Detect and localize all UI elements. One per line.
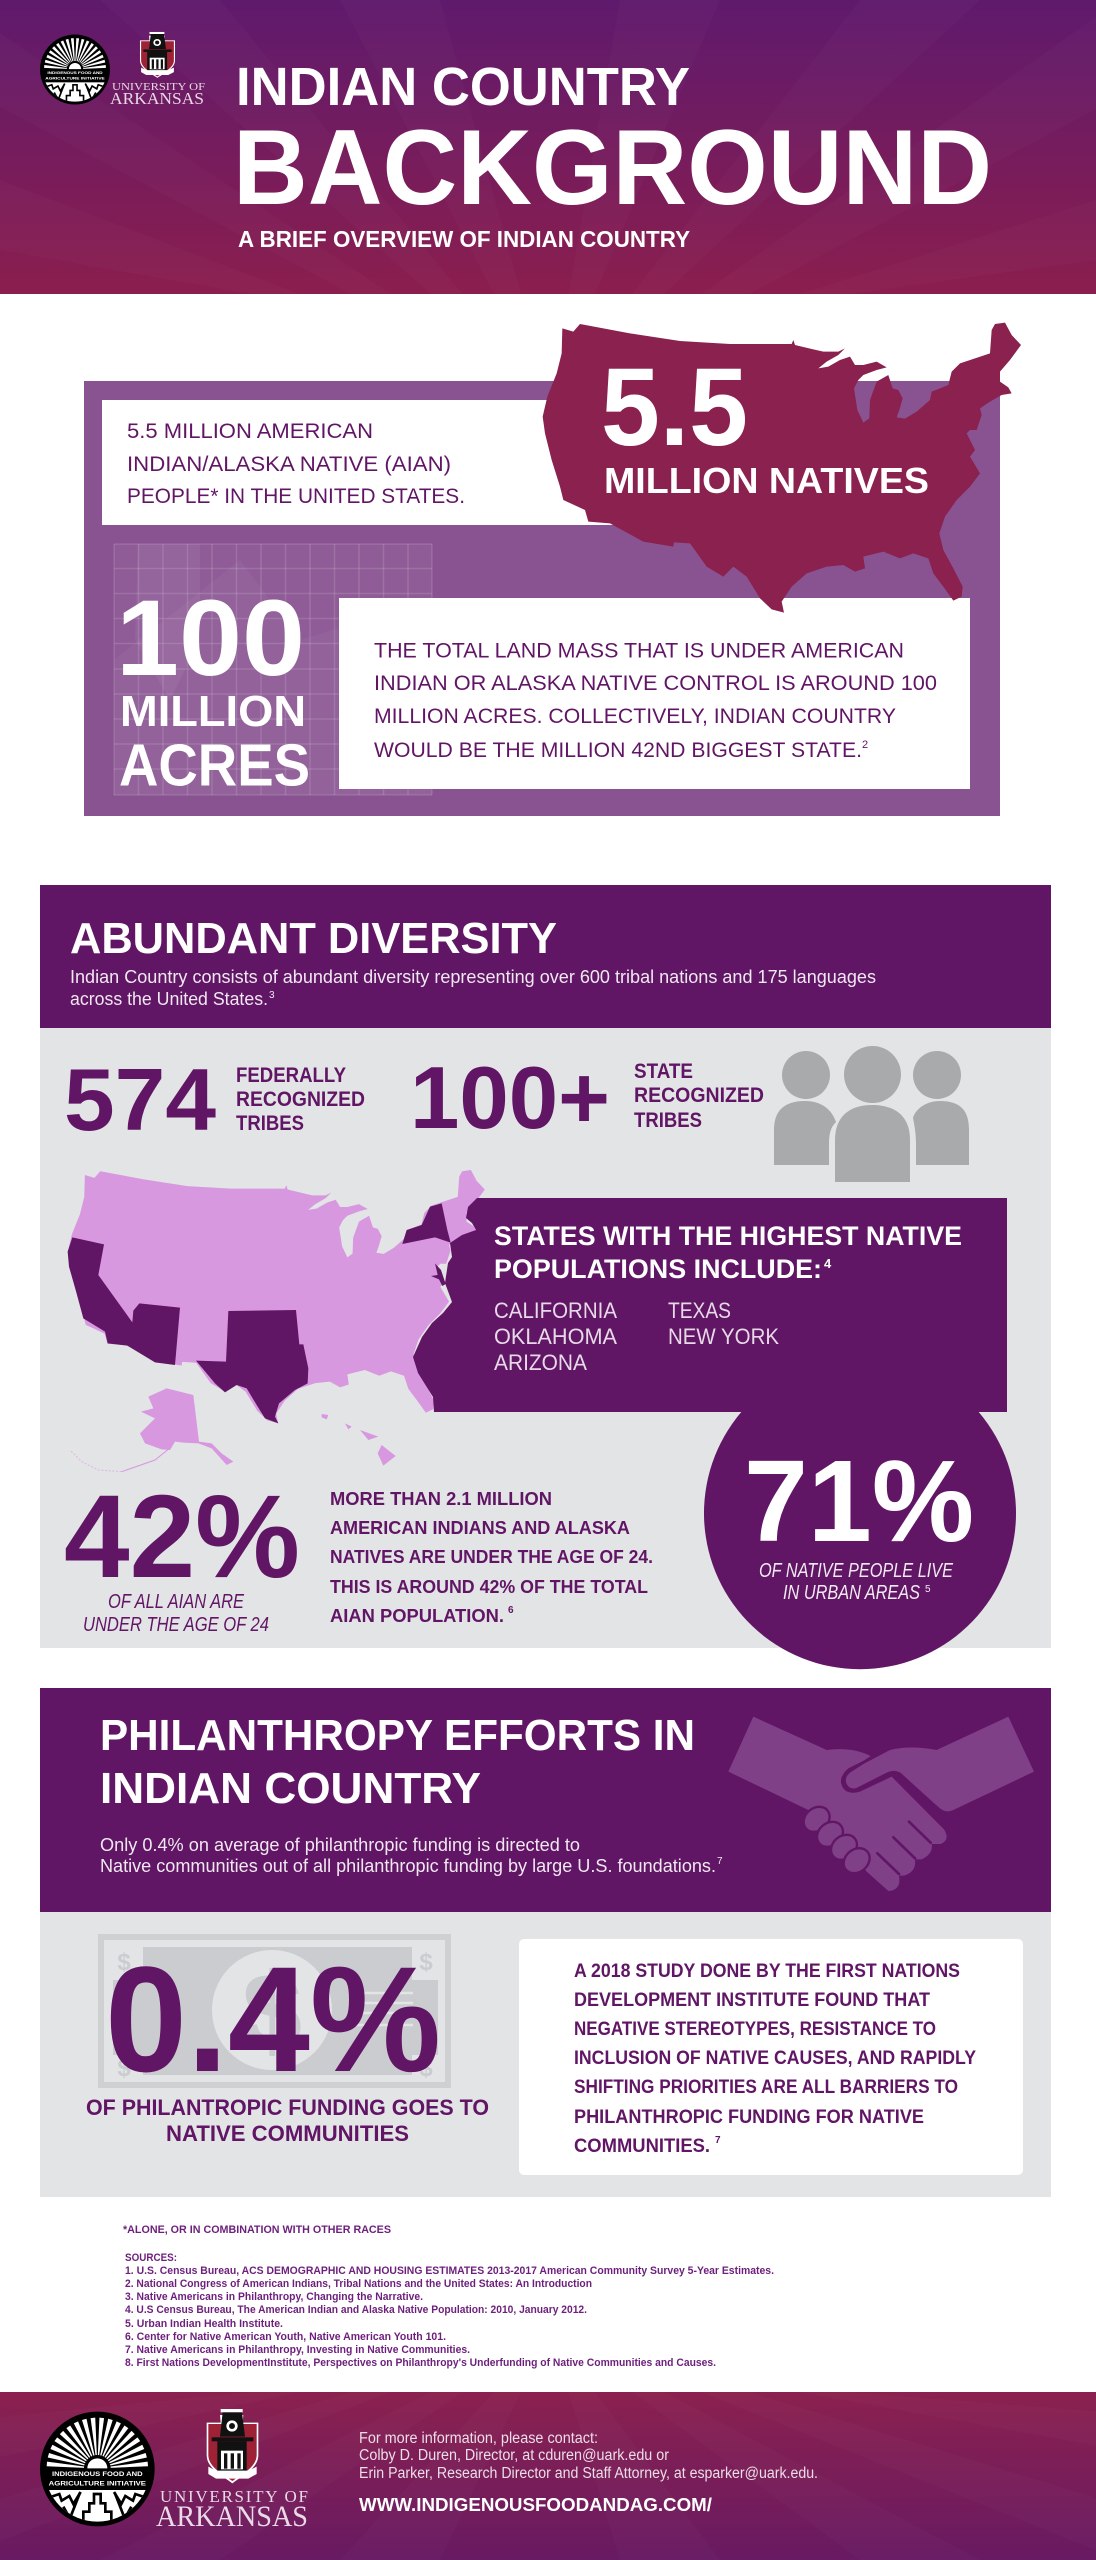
- icon: dollar bill: [98, 1934, 451, 2088]
- stat: 574 federally recognized tribes: 574: [64, 1050, 216, 1149]
- panel: population and land: [84, 323, 1021, 816]
- section header: philanthropy: PHILANTHROPY EFFORTS IN: [100, 1711, 695, 1760]
- stat: 574 federally recognized tribes: [64, 1050, 365, 1149]
- stat: 100 million acres: MILLION: [120, 687, 306, 736]
- callout: 2018 study: 7: [715, 2135, 721, 2146]
- text block: 2.1 million under 24: AMERICAN INDIANS AND ALASKA: [330, 1518, 630, 1538]
- logo: University of Arkansas (footer): ARKANSAS: [156, 2500, 308, 2533]
- stat: 0.4 percent: 0.4%: [105, 1935, 441, 2103]
- footnotes and sources: SOURCES:: [125, 2252, 177, 2264]
- panel: abundant diversity: [40, 885, 1051, 1648]
- subtitle: A BRIEF OVERVIEW OF INDIAN COUNTRY: [238, 226, 690, 252]
- footnotes and sources: 1. U.S. Census Bureau, ACS DEMOGRAPHIC AND HOUSING ESTIMATES 2013-2017 American Community Survey 5-Year Estimates.: [125, 2265, 774, 2277]
- callout: 2018 study: COMMUNITIES.: [574, 2136, 710, 2157]
- stat: 574 federally recognized tribes: TRIBES: [236, 1112, 304, 1135]
- callout: states list box: STATES WITH THE HIGHEST NATIVE: [494, 1221, 962, 1251]
- callout: 71 percent circle: OF NATIVE PEOPLE LIVE: [759, 1560, 954, 1582]
- stat: 100 million acres: [116, 577, 310, 798]
- map: states with highest native populations: [68, 1170, 485, 1472]
- acreage grid: [114, 544, 432, 795]
- stat: 100+ state recognized tribes: [410, 1048, 764, 1147]
- callout: 2018 study: SHIFTING PRIORITIES ARE ALL BARRIERS TO: [574, 2077, 958, 2098]
- text block: 2.1 million under 24: [330, 1489, 653, 1626]
- contact information: Colby D. Duren, Director, at cduren@uark.edu or: [359, 2447, 669, 2464]
- section header: philanthropy: 7: [717, 1856, 723, 1867]
- logo: University of Arkansas (footer): [156, 2409, 308, 2533]
- callout: land mass text box: MILLION ACRES. COLLECTIVELY, INDIAN COUNTRY: [374, 705, 896, 728]
- logo: Indigenous Food and Agriculture Initiative (footer): [40, 2412, 155, 2526]
- stat: 574 federally recognized tribes: FEDERALLY: [236, 1064, 346, 1087]
- stat: 100+ state recognized tribes: STATE: [634, 1060, 693, 1083]
- icon: dollar bill: $: [242, 1950, 302, 2071]
- stat: 100 million acres: 100: [116, 577, 305, 698]
- callout: states list box: POPULATIONS INCLUDE:: [494, 1254, 822, 1284]
- footnotes and sources: 4. U.S Census Bureau, The American Indian and Alaska Native Population: 2010, January 2012.: [125, 2304, 587, 2316]
- callout: 71 percent circle: 5: [925, 1584, 931, 1595]
- stat: 5.5 million natives: MILLION NATIVES: [604, 460, 929, 501]
- logo: University of Arkansas: UNIVERSITY OF: [112, 81, 205, 93]
- callout: states list box: CALIFORNIA: [494, 1298, 617, 1323]
- callout: states list box: 4: [824, 1256, 832, 1271]
- footer banner: [0, 2392, 1096, 2560]
- callout: 5.5 million text box: PEOPLE* IN THE UNITED STATES.: [127, 485, 465, 508]
- callout: 2018 study: INCLUSION OF NATIVE CAUSES, AND RAPIDLY: [574, 2048, 976, 2069]
- callout: 2018 study: A 2018 STUDY DONE BY THE FIRST NATIONS: [574, 1961, 960, 1982]
- callout: land mass text box: INDIAN OR ALASKA NATIVE CONTROL IS AROUND 100: [374, 672, 937, 695]
- stat: 100 million acres: ACRES: [119, 732, 310, 798]
- title: INDIAN COUNTRY: [236, 57, 690, 117]
- icon: dollar bill: $: [419, 2055, 433, 2082]
- stat: 42 percent under age 24: 42%: [64, 1471, 300, 1603]
- callout: 71 percent circle: [704, 1412, 1016, 1669]
- footnotes and sources: 2. National Congress of American Indians, Tribal Nations and the United States: An Introduction: [125, 2278, 592, 2290]
- section header: philanthropy: INDIAN COUNTRY: [100, 1764, 481, 1813]
- title: BACKGROUND: [233, 107, 992, 227]
- stat: 100+ state recognized tribes: 100+: [410, 1048, 610, 1147]
- icon: dollar bill: $: [117, 2055, 131, 2082]
- website: WWW.INDIGENOUSFOODANDAG.COM/: [359, 2495, 712, 2515]
- section header: philanthropy: Only 0.4% on average of philanthropic funding is directed to: [100, 1835, 580, 1855]
- section header: philanthropy: Native communities out of all philanthropic funding by large U.S. foundations.: [100, 1856, 716, 1876]
- section header: abundant diversity: ABUNDANT DIVERSITY: [70, 914, 557, 963]
- logo: Indigenous Food and Agriculture Initiative (footer): AGRICULTURE INITIATIVE: [49, 2482, 146, 2488]
- callout: 71 percent circle: 71%: [744, 1436, 974, 1566]
- logo: Indigenous Food and Agriculture Initiative (footer): INDIGENOUS FOOD AND: [52, 2472, 144, 2478]
- footnotes and sources: 6. Center for Native American Youth, Native American Youth 101.: [125, 2331, 446, 2343]
- contact information: [359, 2430, 818, 2482]
- stat: 100+ state recognized tribes: TRIBES: [634, 1109, 702, 1132]
- stat: 100+ state recognized tribes: RECOGNIZED: [634, 1084, 764, 1107]
- section header: abundant diversity: [40, 885, 1051, 1028]
- caption: philanthropic funding: [86, 2095, 489, 2146]
- icon: handshake: [728, 1717, 1034, 1891]
- footnotes and sources: 5. Urban Indian Health Institute.: [125, 2318, 283, 2330]
- title: [233, 57, 992, 227]
- footnotes and sources: 3. Native Americans in Philanthropy, Changing the Narrative.: [125, 2291, 423, 2303]
- icon: group of people: [774, 1046, 969, 1182]
- section header: philanthropy: [40, 1688, 1051, 1912]
- callout: land mass text box: THE TOTAL LAND MASS THAT IS UNDER AMERICAN: [374, 640, 904, 662]
- callout: 5.5 million text box: INDIAN/ALASKA NATIVE (AIAN): [127, 453, 451, 476]
- callout: land mass text box: [339, 598, 970, 789]
- callout: states list box: TEXAS: [668, 1298, 731, 1323]
- contact information: Erin Parker, Research Director and Staff Attorney, at esparker@uark.edu.: [359, 2465, 818, 2482]
- footnotes and sources: [123, 2224, 774, 2369]
- callout: states list box: OKLAHOMA: [494, 1324, 617, 1349]
- icon: dollar bill: $: [419, 1949, 433, 1976]
- stat: 574 federally recognized tribes: RECOGNIZED: [236, 1088, 365, 1111]
- header banner: [0, 0, 1096, 294]
- logo: University of Arkansas: [110, 32, 205, 108]
- panel: philanthropy efforts: [40, 1688, 1051, 2197]
- callout: 71 percent circle: IN URBAN AREAS: [783, 1582, 921, 1604]
- stat: 42 percent under age 24: OF ALL AIAN ARE: [108, 1591, 245, 1613]
- logo: Indigenous Food and Agriculture Initiative: [40, 35, 110, 105]
- callout: states list box: NEW YORK: [668, 1324, 779, 1349]
- icon: dollar bill: $: [117, 1949, 131, 1976]
- logo: University of Arkansas: ARKANSAS: [110, 89, 204, 108]
- section header: abundant diversity: across the United States.: [70, 989, 268, 1009]
- callout: 2018 study: DEVELOPMENT INSTITUTE FOUND THAT: [574, 1990, 930, 2011]
- text block: 2.1 million under 24: 6: [508, 1605, 514, 1616]
- logo: Indigenous Food and Agriculture Initiative: AGRICULTURE INITIATIVE: [45, 77, 105, 81]
- callout: states list box: [413, 1198, 1007, 1412]
- callout: 2018 study: [519, 1939, 1023, 2175]
- caption: philanthropic funding: NATIVE COMMUNITIES: [166, 2121, 409, 2146]
- callout: 2018 study: PHILANTHROPIC FUNDING FOR NATIVE: [574, 2107, 924, 2128]
- map: United States in crimson: [543, 323, 1021, 613]
- section header: abundant diversity: 3: [269, 990, 275, 1001]
- stat: 42 percent under age 24: UNDER THE AGE OF 24: [83, 1614, 269, 1636]
- section header: abundant diversity: Indian Country consists of abundant diversity representing over 600 tribal nations and 175 languages: [70, 967, 876, 987]
- stat: 5.5 million natives: [601, 346, 929, 501]
- text block: 2.1 million under 24: THIS IS AROUND 42% OF THE TOTAL: [330, 1577, 648, 1597]
- footnotes and sources: *ALONE, OR IN COMBINATION WITH OTHER RACES: [123, 2224, 391, 2236]
- footnotes and sources: 7. Native Americans in Philanthropy, Investing in Native Communities.: [125, 2344, 470, 2356]
- text block: 2.1 million under 24: AIAN POPULATION.: [330, 1606, 504, 1626]
- text block: 2.1 million under 24: NATIVES ARE UNDER THE AGE OF 24.: [330, 1547, 653, 1567]
- callout: 5.5 million text box: [102, 400, 622, 525]
- stat: 5.5 million natives: 5.5: [601, 346, 748, 469]
- callout: land mass text box: WOULD BE THE MILLION 42ND BIGGEST STATE.: [374, 739, 862, 762]
- logo: University of Arkansas (footer): UNIVERSITY OF: [160, 2487, 308, 2506]
- caption: philanthropic funding: OF PHILANTROPIC FUNDING GOES TO: [86, 2095, 489, 2120]
- callout: 2018 study: NEGATIVE STEREOTYPES, RESISTANCE TO: [574, 2019, 936, 2040]
- text block: 2.1 million under 24: MORE THAN 2.1 MILLION: [330, 1489, 552, 1509]
- footnotes and sources: 8. First Nations DevelopmentInstitute, Perspectives on Philanthropy's Underfunding of Native Communities and Causes.: [125, 2357, 716, 2369]
- callout: land mass text box: 2: [862, 739, 868, 751]
- contact information: For more information, please contact:: [359, 2430, 598, 2447]
- logo: Indigenous Food and Agriculture Initiative: INDIGENOUS FOOD AND: [47, 71, 103, 75]
- callout: states list box: ARIZONA: [494, 1350, 587, 1375]
- callout: 5.5 million text box: 5.5 MILLION AMERICAN: [127, 420, 373, 443]
